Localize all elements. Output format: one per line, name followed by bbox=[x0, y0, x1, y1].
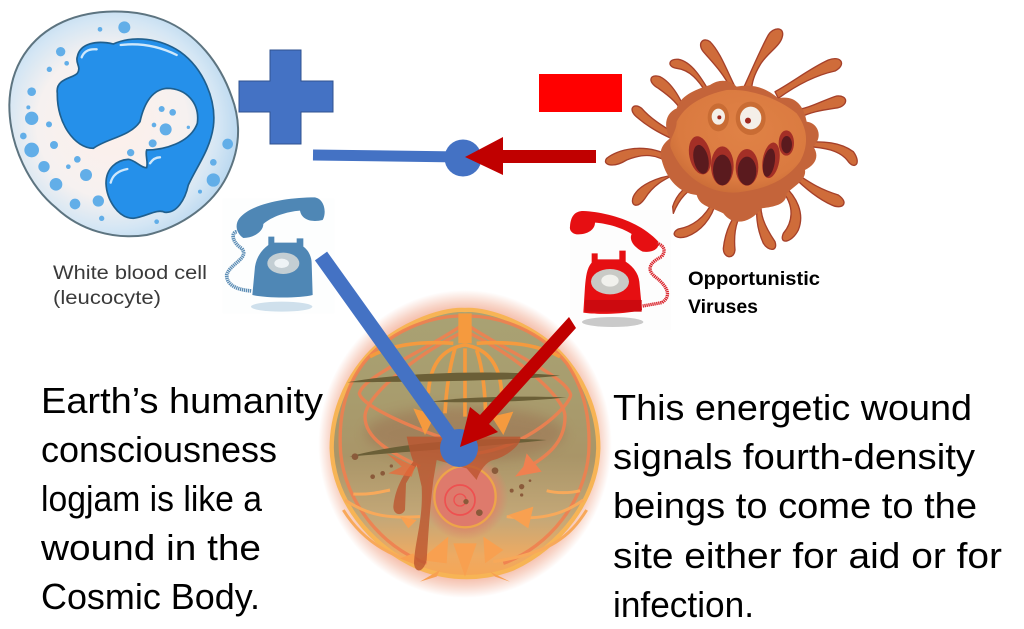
right text block: signals fourth-density bbox=[613, 436, 975, 477]
right text block: infection. bbox=[613, 584, 754, 625]
cell caption bbox=[53, 262, 207, 309]
left text block: Cosmic Body. bbox=[41, 576, 260, 617]
icon: blue telephone bbox=[223, 197, 334, 313]
left text block: wound in the bbox=[40, 527, 261, 568]
right text block: site either for aid or for bbox=[613, 535, 1002, 576]
arrow: blue line to node bbox=[313, 155, 462, 157]
virus caption: Viruses bbox=[688, 297, 758, 318]
arrow: blue arrow into wound bbox=[321, 256, 459, 449]
icon: minus sign bbox=[539, 74, 622, 112]
icon: red telephone bbox=[570, 210, 671, 330]
left text block: Earth’s humanity bbox=[41, 380, 323, 421]
cell caption: (leucocyte) bbox=[53, 287, 161, 309]
lower node bbox=[440, 429, 478, 467]
right text block: beings to come to the bbox=[613, 485, 977, 526]
icon: wounded cosmic body bbox=[318, 290, 612, 598]
arrow: red arrow to node bbox=[465, 137, 596, 175]
right text block: This energetic wound bbox=[613, 387, 972, 428]
icon: white blood cell bbox=[9, 11, 238, 236]
virus caption bbox=[688, 269, 820, 318]
left text block bbox=[40, 380, 323, 617]
cell caption: White blood cell bbox=[53, 262, 207, 284]
virus caption: Opportunistic bbox=[688, 269, 820, 290]
icon: opportunistic virus bbox=[605, 29, 857, 257]
arrow: red arrow into wound bbox=[460, 317, 576, 447]
right text block bbox=[613, 387, 1002, 625]
left text block: logjam is like a bbox=[41, 478, 263, 519]
icon: plus sign bbox=[239, 50, 333, 144]
left text block: consciousness bbox=[41, 429, 277, 470]
top node bbox=[444, 140, 482, 176]
